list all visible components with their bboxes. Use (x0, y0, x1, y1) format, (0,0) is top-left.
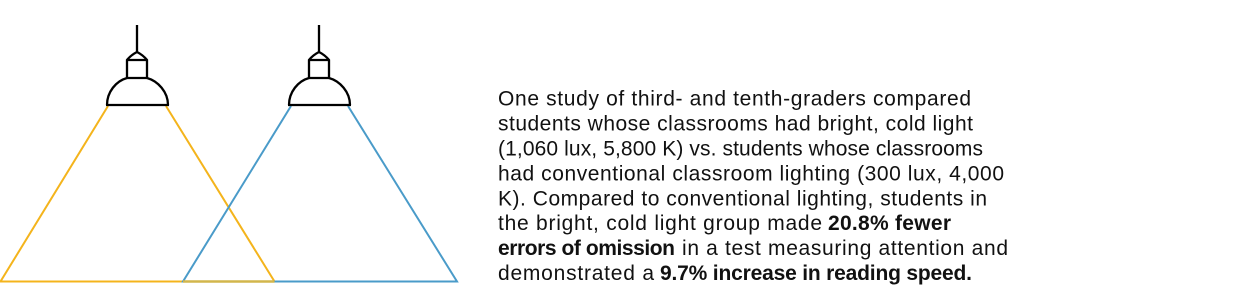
blue light cone: conventional light (183, 106, 457, 282)
yellow light cone: bright, cold light (0, 106, 274, 282)
text block: study description: 20.8% fewer (828, 212, 951, 235)
text block: study description: K). Compared to conventional lighting, students in (498, 188, 987, 210)
text block: study description (498, 88, 1008, 285)
text block: study description: errors of omission (498, 237, 675, 260)
text block: study description: in a test measuring attention and (682, 237, 1008, 260)
text block: study description: demonstrated a (498, 262, 654, 285)
text block: study description: 9.7% increase in reading speed. (660, 262, 972, 285)
icon: left pendant lamp (106, 25, 169, 105)
text block: study description: students whose classrooms had bright, cold light (498, 112, 973, 136)
icon: right pendant lamp (288, 25, 351, 105)
text block: study description: had conventional classroom lighting (300 lux, 4,000 (498, 162, 1004, 186)
text block: study description: One study of third- and tenth-graders compared (498, 88, 971, 110)
text block: study description: (1,060 lux, 5,800 K) vs. students whose classrooms (498, 138, 983, 160)
text block: study description: the bright, cold light group made (498, 212, 822, 235)
cone overlap on floor line (183, 280, 274, 283)
